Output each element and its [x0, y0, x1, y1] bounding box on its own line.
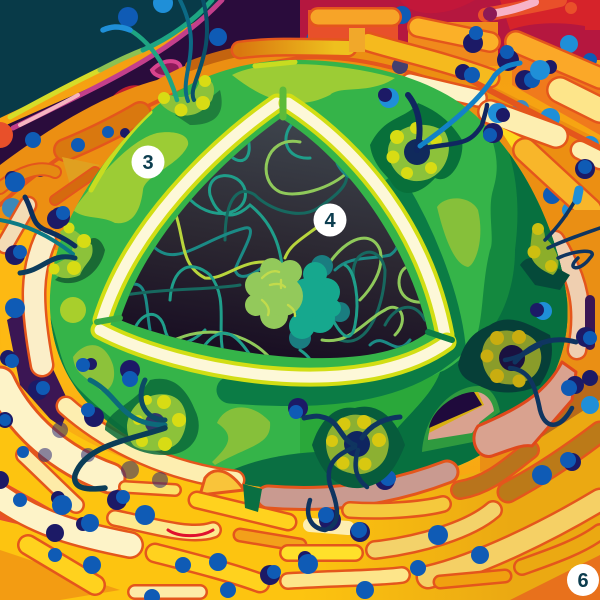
nucleolus	[245, 255, 350, 349]
pore strands	[0, 197, 75, 273]
lime patch lower-left	[73, 345, 114, 391]
nucleus shaded right side	[478, 140, 568, 350]
icon: red organelle on left edge	[0, 122, 13, 148]
panel: orange ER band above nucleus	[0, 40, 600, 250]
pore strands	[304, 416, 400, 530]
badge: 4: 4	[324, 210, 336, 232]
pore: upper right	[370, 63, 520, 193]
nuclear envelope frame	[97, 90, 452, 377]
panel: front ER tubes	[0, 382, 300, 600]
nucleus left shadow	[50, 318, 124, 434]
panel: upper ER tubes	[0, 10, 600, 210]
nucleus visible through gap	[243, 484, 262, 512]
icon: nuclear envelope opening	[422, 386, 500, 452]
pore strands	[408, 63, 520, 150]
pore: right	[520, 190, 600, 290]
lime patch left	[73, 132, 188, 223]
pore strands	[545, 190, 600, 268]
nucleus sphere	[50, 60, 568, 487]
pore: lower left	[75, 379, 199, 489]
lime spot	[60, 297, 86, 323]
dots: ribosomes hidden behind tubes	[2, 6, 599, 218]
panel: lower-right ER tubes	[243, 362, 600, 600]
badge: 6: 6	[577, 570, 589, 592]
pore: bottom center	[304, 407, 405, 530]
panel: lower cytoplasm fill	[0, 367, 600, 600]
panel: purple intermembrane space	[0, 0, 300, 170]
ribosomes in front near left pore	[50, 206, 70, 227]
nucleus bottom shadow	[234, 452, 333, 487]
pore: lower right	[458, 320, 576, 425]
mauve ER connecting tube	[474, 362, 576, 457]
panel: cytoplasm dark teal	[0, 0, 225, 118]
triangular cut-away interior	[120, 118, 428, 380]
pore strands	[505, 340, 576, 425]
chromatin strands	[129, 124, 426, 358]
triangular cut-away rim shadow	[230, 190, 452, 393]
nucleus dark right edge	[392, 153, 568, 475]
membrane stripes	[10, 0, 222, 128]
rim highlight	[91, 112, 150, 190]
panel: right ER tubes	[480, 210, 600, 500]
pore strands	[75, 380, 165, 489]
lime patch top	[232, 64, 395, 103]
panel: left ER tubes	[0, 205, 70, 430]
badge: 3: 3	[142, 152, 154, 174]
badge: 3	[132, 146, 164, 178]
nucleus lower lip shade	[300, 372, 440, 460]
pore: top-left	[103, 0, 222, 125]
lime patch right	[437, 198, 480, 267]
lime patch bottom	[212, 407, 270, 465]
badge: 4	[314, 204, 346, 236]
pore strands	[103, 0, 207, 101]
badge: 6	[567, 564, 599, 596]
panel: upper red organelle zone	[220, 0, 600, 60]
pore: left	[0, 197, 105, 283]
